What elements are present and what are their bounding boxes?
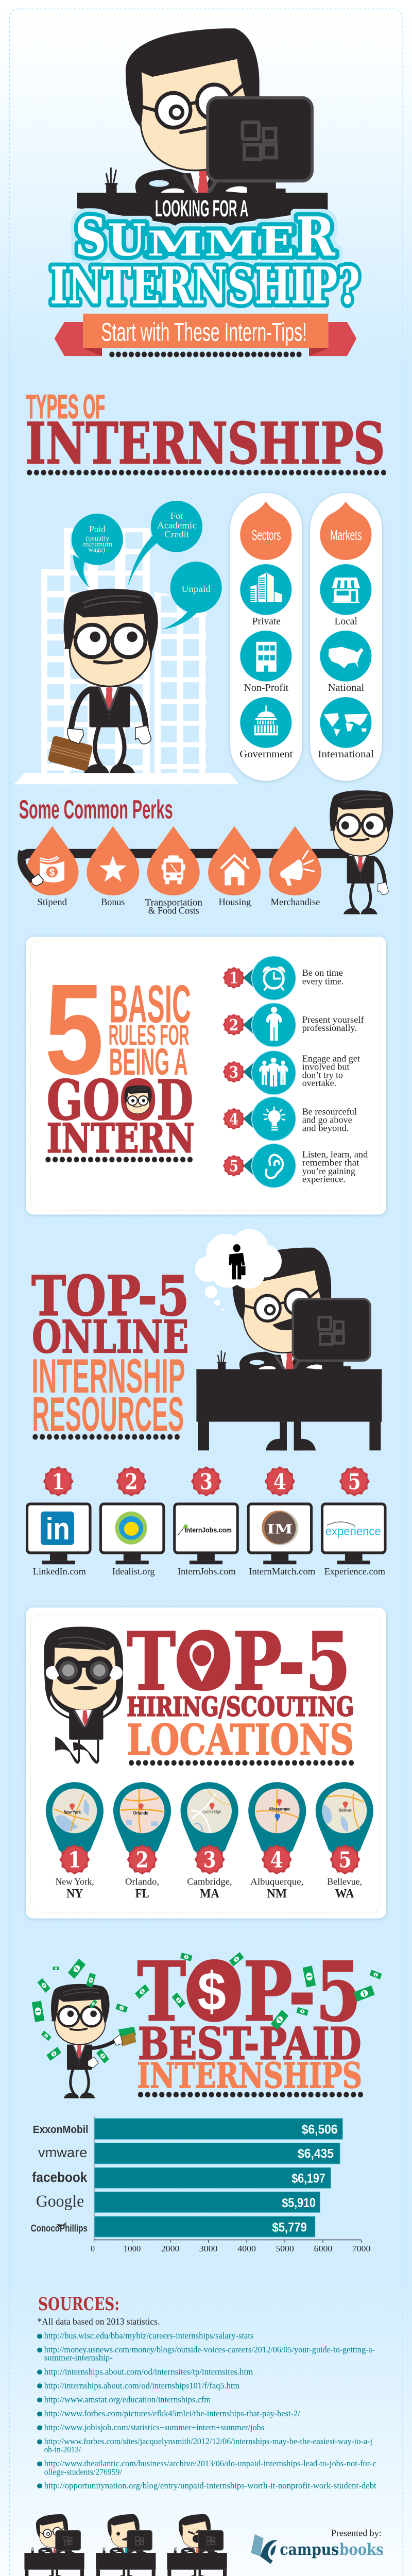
icon: local shop bbox=[320, 564, 371, 615]
panel: sectors: Government bbox=[239, 749, 293, 760]
panel: sectors: Non-Profit bbox=[244, 683, 289, 693]
heading: top-5 best-paid internships: INTERNSHIPS bbox=[137, 2055, 362, 2096]
resource 4: internmatch: IM bbox=[267, 1521, 293, 1537]
perks labels: Transportation bbox=[145, 897, 202, 908]
speech bubble: for academic credit: Credit bbox=[164, 530, 190, 539]
location 2: orlando: Orlando, bbox=[125, 1877, 159, 1887]
title: summer: E bbox=[260, 218, 294, 265]
location 2: orlando bbox=[113, 1782, 171, 1901]
arm reaching to first drop bbox=[22, 851, 43, 886]
resource 2: idealist bbox=[100, 1466, 164, 1577]
sources list: http://www.amstat.org/education/internships.cfm bbox=[44, 2395, 211, 2404]
rule 5: listen, learn: 5 bbox=[229, 1157, 238, 1175]
icon: non-profit building bbox=[240, 631, 291, 682]
panel: top-5 hiring locations bbox=[26, 1607, 386, 1919]
rule 1: be on time: Be on time bbox=[302, 968, 343, 978]
panel: markets: International bbox=[318, 749, 374, 760]
speech bubble: for academic credit bbox=[127, 501, 202, 587]
rule 3: engage and get involved: Engage and get bbox=[302, 1054, 360, 1064]
title: summer bbox=[75, 205, 336, 268]
heading: top-5 hiring/scouting locations: TOP-5 bbox=[127, 1615, 351, 1708]
speech bubble: paid: minimum bbox=[83, 540, 113, 548]
flying dollar bills bbox=[32, 1952, 382, 2063]
location 1: new york: New York bbox=[63, 1809, 81, 1815]
location 1: new york: NY bbox=[66, 1887, 83, 1901]
chart axis ticks and labels: 5000 bbox=[276, 2244, 294, 2253]
heading: top-5 hiring/scouting locations: LOCATIONS bbox=[127, 1715, 354, 1765]
rule 5: listen, learn: experience. bbox=[302, 1174, 346, 1184]
intern character with briefcase bbox=[47, 589, 158, 773]
heading: top-5 online internship resources: RESOURCES bbox=[32, 1387, 184, 1442]
title: summer: M bbox=[147, 224, 202, 264]
bar: facebook: $6,197 bbox=[291, 2172, 325, 2186]
title: summer: M bbox=[204, 224, 259, 264]
location 5: bellevue: 5 bbox=[338, 1846, 351, 1873]
rule 4: be resourceful: Be resourceful bbox=[302, 1107, 357, 1117]
resource 4: internmatch: InternMatch.com bbox=[249, 1566, 316, 1577]
bar: facebook: facebook bbox=[32, 2169, 88, 2185]
thought cloud with job seeker bbox=[195, 1229, 282, 1311]
resource 3: internjobs: 3 bbox=[200, 1468, 213, 1495]
resource 4: internmatch bbox=[248, 1466, 316, 1577]
perks labels: Stipend bbox=[37, 896, 67, 907]
resource 2: idealist: 2 bbox=[125, 1468, 138, 1495]
heading: top-5 online internship resources bbox=[31, 1264, 189, 1442]
rule 5: listen, learn bbox=[223, 1144, 368, 1188]
sources list: http://www.forbes.com/sites/jacquelynsmith/2012/12/06/internships-may-be-the-easiest-way-to-a-j bbox=[44, 2437, 372, 2446]
resource 1: linkedin: in bbox=[46, 1512, 70, 1546]
top-5 resources row bbox=[27, 1466, 385, 1577]
resource 1: linkedin bbox=[27, 1466, 90, 1577]
bar: conocophillips: ConocoPhillips bbox=[31, 2223, 88, 2233]
rule 5: listen, learn: you’re gaining bbox=[302, 1166, 355, 1176]
location 3: cambridge bbox=[181, 1782, 238, 1901]
bar: google bbox=[36, 2192, 320, 2212]
location 3: cambridge: Cambridge bbox=[202, 1809, 221, 1814]
panel: markets: National bbox=[328, 683, 364, 693]
ribbon subtitle bbox=[55, 314, 356, 356]
speech bubble: paid bbox=[72, 514, 123, 588]
bar: conocophillips: $5,779 bbox=[272, 2221, 307, 2234]
resource 5: experience bbox=[322, 1466, 385, 1577]
sources list: http://internships.about.com/od/internships101/f/faq5.htm bbox=[44, 2381, 240, 2391]
location 3: cambridge: MA bbox=[200, 1887, 219, 1901]
sources note: *All data based on 2013 statistics. bbox=[37, 2317, 160, 2327]
icon: stipend money bbox=[40, 856, 64, 883]
heading: types of internships: TYPES OF bbox=[26, 388, 105, 426]
rule 4: be resourceful: and beyond. bbox=[302, 1123, 349, 1133]
rule 4: be resourceful bbox=[223, 1097, 357, 1141]
location 1: new york: 1 bbox=[68, 1846, 81, 1873]
location 4: albuquerque: Albuquerque bbox=[269, 1806, 290, 1811]
heading: 5 basic rules for being a good intern: INTERN bbox=[47, 1115, 195, 1162]
heading: top-5 online internship resources: TOP-5 bbox=[31, 1264, 189, 1328]
chart axis ticks and labels: 0 bbox=[91, 2244, 95, 2253]
title: internship?: INTERNSHIP? bbox=[50, 257, 360, 316]
title: summer: R bbox=[296, 205, 336, 268]
chart axis ticks and labels: 1000 bbox=[124, 2244, 141, 2253]
speech bubble: unpaid: Unpaid bbox=[182, 584, 211, 594]
resource 1: linkedin: 1 bbox=[52, 1468, 65, 1495]
location 2: orlando: Orlando bbox=[133, 1810, 149, 1816]
heading: sources: SOURCES: bbox=[38, 2294, 119, 2314]
sources list: http://money.usnews.com/money/blogs/outside-voices-careers/2012/06/05/your-guide-to-getting-a- bbox=[44, 2345, 375, 2354]
speech bubble: paid: Paid bbox=[89, 524, 106, 534]
icon: person bbox=[266, 1007, 282, 1041]
icon: merchandise megaphone bbox=[280, 851, 314, 886]
speech bubble: paid: (usually bbox=[85, 534, 110, 543]
bar: exxonmobil bbox=[33, 2119, 342, 2139]
heading: top-5 hiring/scouting locations bbox=[127, 1615, 354, 1765]
icon: ear bbox=[266, 1155, 283, 1178]
heading: top-5 best-paid internships: $ bbox=[198, 1961, 226, 2022]
location 3: cambridge: 3 bbox=[203, 1846, 216, 1873]
resource 2: idealist: Idealist.org bbox=[112, 1566, 155, 1577]
rule 3: engage and get involved: involved but bbox=[302, 1062, 350, 1072]
types of internships section bbox=[14, 493, 382, 784]
icon: alarm clock bbox=[263, 967, 285, 990]
sources list: http://www.theatlantic.com/business/archive/2013/06/do-unpaid-internships-lead-to-jobs-not-for-c bbox=[44, 2459, 376, 2468]
icon: transportation bus bbox=[162, 855, 185, 884]
sources list: http://www.jobisjob.com/statistics+summer+intern+summer/jobs bbox=[44, 2423, 264, 2432]
icon: job seeker silhouette bbox=[229, 1244, 246, 1279]
bar: vmware bbox=[38, 2143, 340, 2164]
rule 5: listen, learn: Listen, learn, and bbox=[302, 1149, 368, 1160]
icon: group of people bbox=[259, 1058, 288, 1087]
location 5: bellevue bbox=[316, 1782, 373, 1901]
speech bubble: for academic credit: For bbox=[170, 511, 183, 521]
icon: government capitol bbox=[240, 697, 291, 748]
heading: some common perks: Some Common Perks bbox=[19, 795, 173, 824]
bar: vmware: vmware bbox=[38, 2145, 87, 2160]
bar: google: Google bbox=[36, 2192, 84, 2211]
heading: 5 basic rules for being a good intern: GOOD bbox=[47, 1069, 193, 1132]
resource 3: internjobs: InternJobs.com bbox=[184, 1526, 232, 1534]
heading: 5 basic rules for being a good intern: BEING A bbox=[109, 1041, 188, 1083]
icon: private buildings bbox=[240, 564, 291, 615]
rule 3: engage and get involved: overtake. bbox=[302, 1078, 336, 1088]
footer intern 2 no glasses bbox=[96, 2514, 156, 2576]
footer intern 3 with big nose bbox=[167, 2514, 227, 2576]
presented by campusbooks logo: books bbox=[339, 2540, 384, 2559]
perks labels: Bonus bbox=[101, 896, 125, 907]
resource 5: experience: 5 bbox=[348, 1468, 361, 1495]
heading: 5 basic rules for being a good intern bbox=[45, 957, 195, 1162]
footer intern 1 with glasses bbox=[24, 2514, 84, 2576]
panel: markets: Local bbox=[334, 616, 357, 627]
rule 1: be on time: every time. bbox=[302, 976, 344, 986]
speech bubble: paid: wage) bbox=[88, 546, 105, 553]
location 1: new york bbox=[46, 1782, 104, 1901]
presented by campusbooks logo: campus bbox=[280, 2540, 339, 2559]
chart axis ticks and labels: 2000 bbox=[161, 2244, 179, 2253]
location pins row bbox=[46, 1782, 373, 1901]
chart axis ticks and labels: 7000 bbox=[352, 2244, 370, 2253]
location 5: bellevue: Bellevue bbox=[339, 1807, 352, 1813]
rule 3: engage and get involved: 3 bbox=[229, 1063, 238, 1081]
location 2: orlando: 2 bbox=[136, 1846, 148, 1873]
scout intern with binoculars bbox=[44, 1627, 123, 1764]
title: summer: U bbox=[108, 214, 146, 266]
heading: top-5 best-paid internships bbox=[137, 1944, 362, 2096]
location 2: orlando: FL bbox=[135, 1887, 149, 1901]
rule 4: be resourceful: 4 bbox=[229, 1110, 238, 1128]
chart axis ticks and labels: 6000 bbox=[314, 2244, 332, 2253]
perks labels: & Food Costs bbox=[148, 905, 199, 916]
presented by campusbooks logo bbox=[251, 2528, 384, 2564]
location 4: albuquerque bbox=[248, 1782, 306, 1901]
intern at desk thinking bbox=[196, 1248, 382, 1450]
hero: intern at desk with monitor bbox=[77, 28, 328, 233]
bar: conocophillips bbox=[31, 2216, 315, 2237]
sources list: http://www.forbes.com/pictures/efkk45mlei/the-internships-that-pay-best-2/ bbox=[44, 2409, 300, 2418]
lower page section bbox=[19, 2192, 389, 2576]
ribbon subtitle: Start with These Intern-Tips! bbox=[101, 318, 307, 347]
icon: national map bbox=[320, 631, 371, 682]
panel: sectors: Private bbox=[252, 616, 281, 627]
presented by campusbooks logo: Presented by: bbox=[331, 2528, 382, 2538]
icon: light bulb bbox=[264, 1107, 285, 1130]
heading: types of internships: INTERNSHIPS bbox=[25, 411, 385, 477]
rule 2: present yourself: professionally. bbox=[302, 1023, 357, 1033]
heading: top-5 hiring/scouting locations: HIRING/SCOUTING bbox=[127, 1691, 354, 1722]
perks labels: Merchandise bbox=[271, 896, 320, 907]
rule 4: be resourceful: and go above bbox=[302, 1115, 352, 1125]
speech bubble: for academic credit: Academic bbox=[157, 520, 197, 531]
location 5: bellevue: Bellevue, bbox=[327, 1877, 362, 1887]
location 5: bellevue: WA bbox=[335, 1887, 354, 1901]
heading: top-5 best-paid internships: TOP-5 bbox=[137, 1944, 362, 2040]
rule 3: engage and get involved bbox=[223, 1050, 360, 1095]
perks labels: Housing bbox=[218, 896, 251, 907]
sources list: summer-internship- bbox=[44, 2353, 113, 2363]
location 4: albuquerque: Albuquerque, bbox=[250, 1877, 303, 1887]
location 4: albuquerque: 4 bbox=[270, 1846, 283, 1873]
perks labels bbox=[37, 896, 320, 916]
city buildings backdrop bbox=[14, 528, 239, 784]
title: summer: S bbox=[75, 205, 107, 268]
bar: facebook bbox=[32, 2167, 331, 2188]
sources list: ollege-students/276959/ bbox=[44, 2467, 122, 2477]
icon: stipend money: $ bbox=[49, 867, 55, 878]
rule 2: present yourself bbox=[223, 1003, 364, 1047]
location 1: new york: New York, bbox=[56, 1877, 94, 1887]
intern with wallet bbox=[51, 1984, 136, 2098]
sources list: ob-in-2013/ bbox=[44, 2445, 81, 2454]
panel: sectors bbox=[230, 493, 302, 781]
rule 3: engage and get involved: don’t try to bbox=[302, 1070, 343, 1080]
sources list: http://internships.about.com/od/internsites/tp/internsites.htm bbox=[44, 2367, 253, 2377]
icon: bonus star bbox=[99, 855, 127, 882]
chart axis ticks and labels: 3000 bbox=[199, 2244, 217, 2253]
resource 5: experience: experience bbox=[325, 1524, 381, 1538]
money-raining intern bbox=[32, 1952, 382, 2098]
bar: exxonmobil: ExxonMobil bbox=[33, 2124, 88, 2136]
icon: housing house bbox=[221, 855, 249, 885]
icon: international world map bbox=[320, 697, 371, 748]
bar: vmware: $6,435 bbox=[298, 2147, 334, 2161]
location 3: cambridge: Cambridge, bbox=[187, 1877, 232, 1887]
panel: markets bbox=[310, 493, 382, 781]
bar: exxonmobil: $6,506 bbox=[302, 2123, 338, 2137]
rule 2: present yourself: Present yourself bbox=[302, 1015, 364, 1025]
heading: top-5 online internship resources: INTERNSHIP bbox=[31, 1349, 185, 1403]
rule 1: be on time: 1 bbox=[229, 969, 238, 987]
location 4: albuquerque: NM bbox=[267, 1887, 287, 1901]
chart axis ticks and labels bbox=[91, 2240, 370, 2253]
resource 3: internjobs bbox=[175, 1466, 237, 1577]
sources list bbox=[37, 2331, 376, 2490]
heading: top-5 online internship resources: ONLINE bbox=[32, 1310, 188, 1363]
resource 1: linkedin: LinkedIn.com bbox=[33, 1566, 86, 1577]
sources list: http://bus.wisc.edu/bba/mybiz/careers-internships/salary-stats bbox=[44, 2331, 253, 2341]
perks row bbox=[22, 826, 350, 916]
title: looking for a: LOOKING FOR A bbox=[155, 196, 248, 222]
chart axis ticks and labels: 4000 bbox=[237, 2244, 256, 2253]
icon: campusbooks book mark bbox=[251, 2534, 278, 2564]
heading: 5 basic rules for being a good intern: BASIC bbox=[109, 975, 191, 1034]
intern pointing at perks bbox=[330, 790, 393, 914]
speech bubble: unpaid bbox=[162, 562, 222, 629]
resource 3: internjobs: InternJobs.com bbox=[178, 1566, 236, 1577]
heading: top-5 best-paid internships: BEST-PAID bbox=[138, 2018, 362, 2070]
icon: map pin in O bbox=[190, 1640, 214, 1682]
rule 2: present yourself: 2 bbox=[229, 1015, 238, 1034]
heading: 5 basic rules for being a good intern: 5 bbox=[45, 957, 104, 1101]
panel: 5 basic rules bbox=[26, 937, 386, 1215]
resource 5: experience: Experience.com bbox=[324, 1566, 385, 1577]
panel: markets: Markets bbox=[330, 527, 362, 543]
resource 4: internmatch: 4 bbox=[273, 1468, 286, 1495]
rule 5: listen, learn: remember that bbox=[302, 1158, 359, 1168]
sources list: http://opportunitynation.org/blog/entry/unpaid-internships-worth-it-nonprofit-work-student-debt bbox=[44, 2481, 376, 2490]
panel: sectors: Sectors bbox=[251, 527, 281, 543]
bar chart: best-paid internships bbox=[32, 2116, 362, 2240]
rule 1: be on time bbox=[223, 956, 344, 1000]
bar: google: $5,910 bbox=[282, 2196, 316, 2210]
heading: 5 basic rules for being a good intern: RULES FOR bbox=[109, 1020, 189, 1051]
